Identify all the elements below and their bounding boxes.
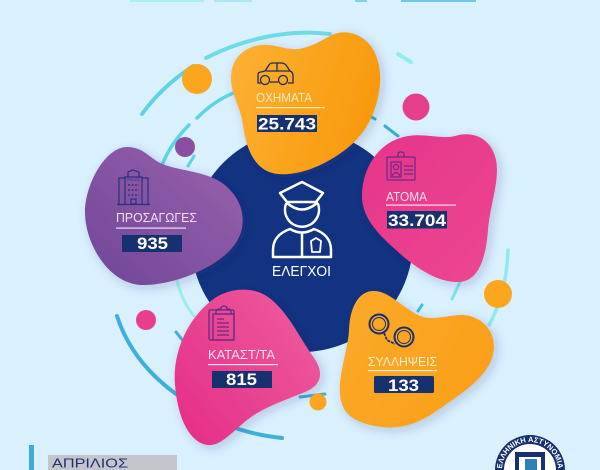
panel: reports (175, 290, 320, 445)
value: 33.704 (388, 211, 447, 230)
label: ΟΧΗΜΑΤΑ (256, 91, 313, 105)
value (212, 371, 272, 389)
icon: police building (117, 170, 150, 204)
panel: arrests (340, 291, 494, 427)
cut-off title remnants (130, 0, 476, 2)
dot: orange top left (182, 64, 212, 94)
panel: detentions (85, 147, 243, 285)
value: 935 (137, 235, 168, 253)
value: 133 (388, 377, 419, 395)
divider (256, 107, 325, 108)
divider (116, 228, 186, 229)
icon: car (258, 63, 293, 84)
value (122, 235, 182, 253)
dot: orange right (484, 280, 512, 308)
logo: Hellenic Police: ΕΛΛΗΝΙΚΗ ΑΣΤΥΝΟΜΙΑ (496, 436, 563, 468)
label: ΠΡΟΣΑΓΩΓΕΣ (116, 211, 197, 225)
decorative orbit arcs (117, 33, 508, 438)
value (374, 376, 434, 395)
center label: ΕΛΕΓΧΟΙ (272, 264, 331, 280)
icon: handcuffs (370, 314, 414, 346)
label: ΚΑΤΑΣΤ/ΤΑ (208, 348, 276, 362)
icon: id badge (387, 152, 415, 180)
dot: orange bottom (310, 394, 326, 410)
value: 25.743 (258, 114, 316, 134)
icon: police building: POLICE (127, 178, 141, 182)
panel: persons (362, 134, 497, 282)
panel: vehicles (231, 32, 380, 174)
date bar accent (29, 445, 34, 470)
label: ΑΤΟΜΑ (386, 190, 428, 204)
central circle (191, 130, 413, 352)
divider (208, 364, 278, 365)
dot: pink lower left (136, 310, 156, 330)
dot: pink top right (402, 94, 430, 120)
label: ΣΥΛΛΗΨΕΙΣ (368, 355, 437, 369)
icon: clipboard (209, 306, 234, 340)
icon: police officer (273, 182, 331, 257)
date label (48, 455, 177, 470)
value: 815 (226, 371, 257, 389)
divider (368, 370, 437, 371)
dot: purple left (175, 137, 195, 157)
divider (386, 204, 456, 206)
